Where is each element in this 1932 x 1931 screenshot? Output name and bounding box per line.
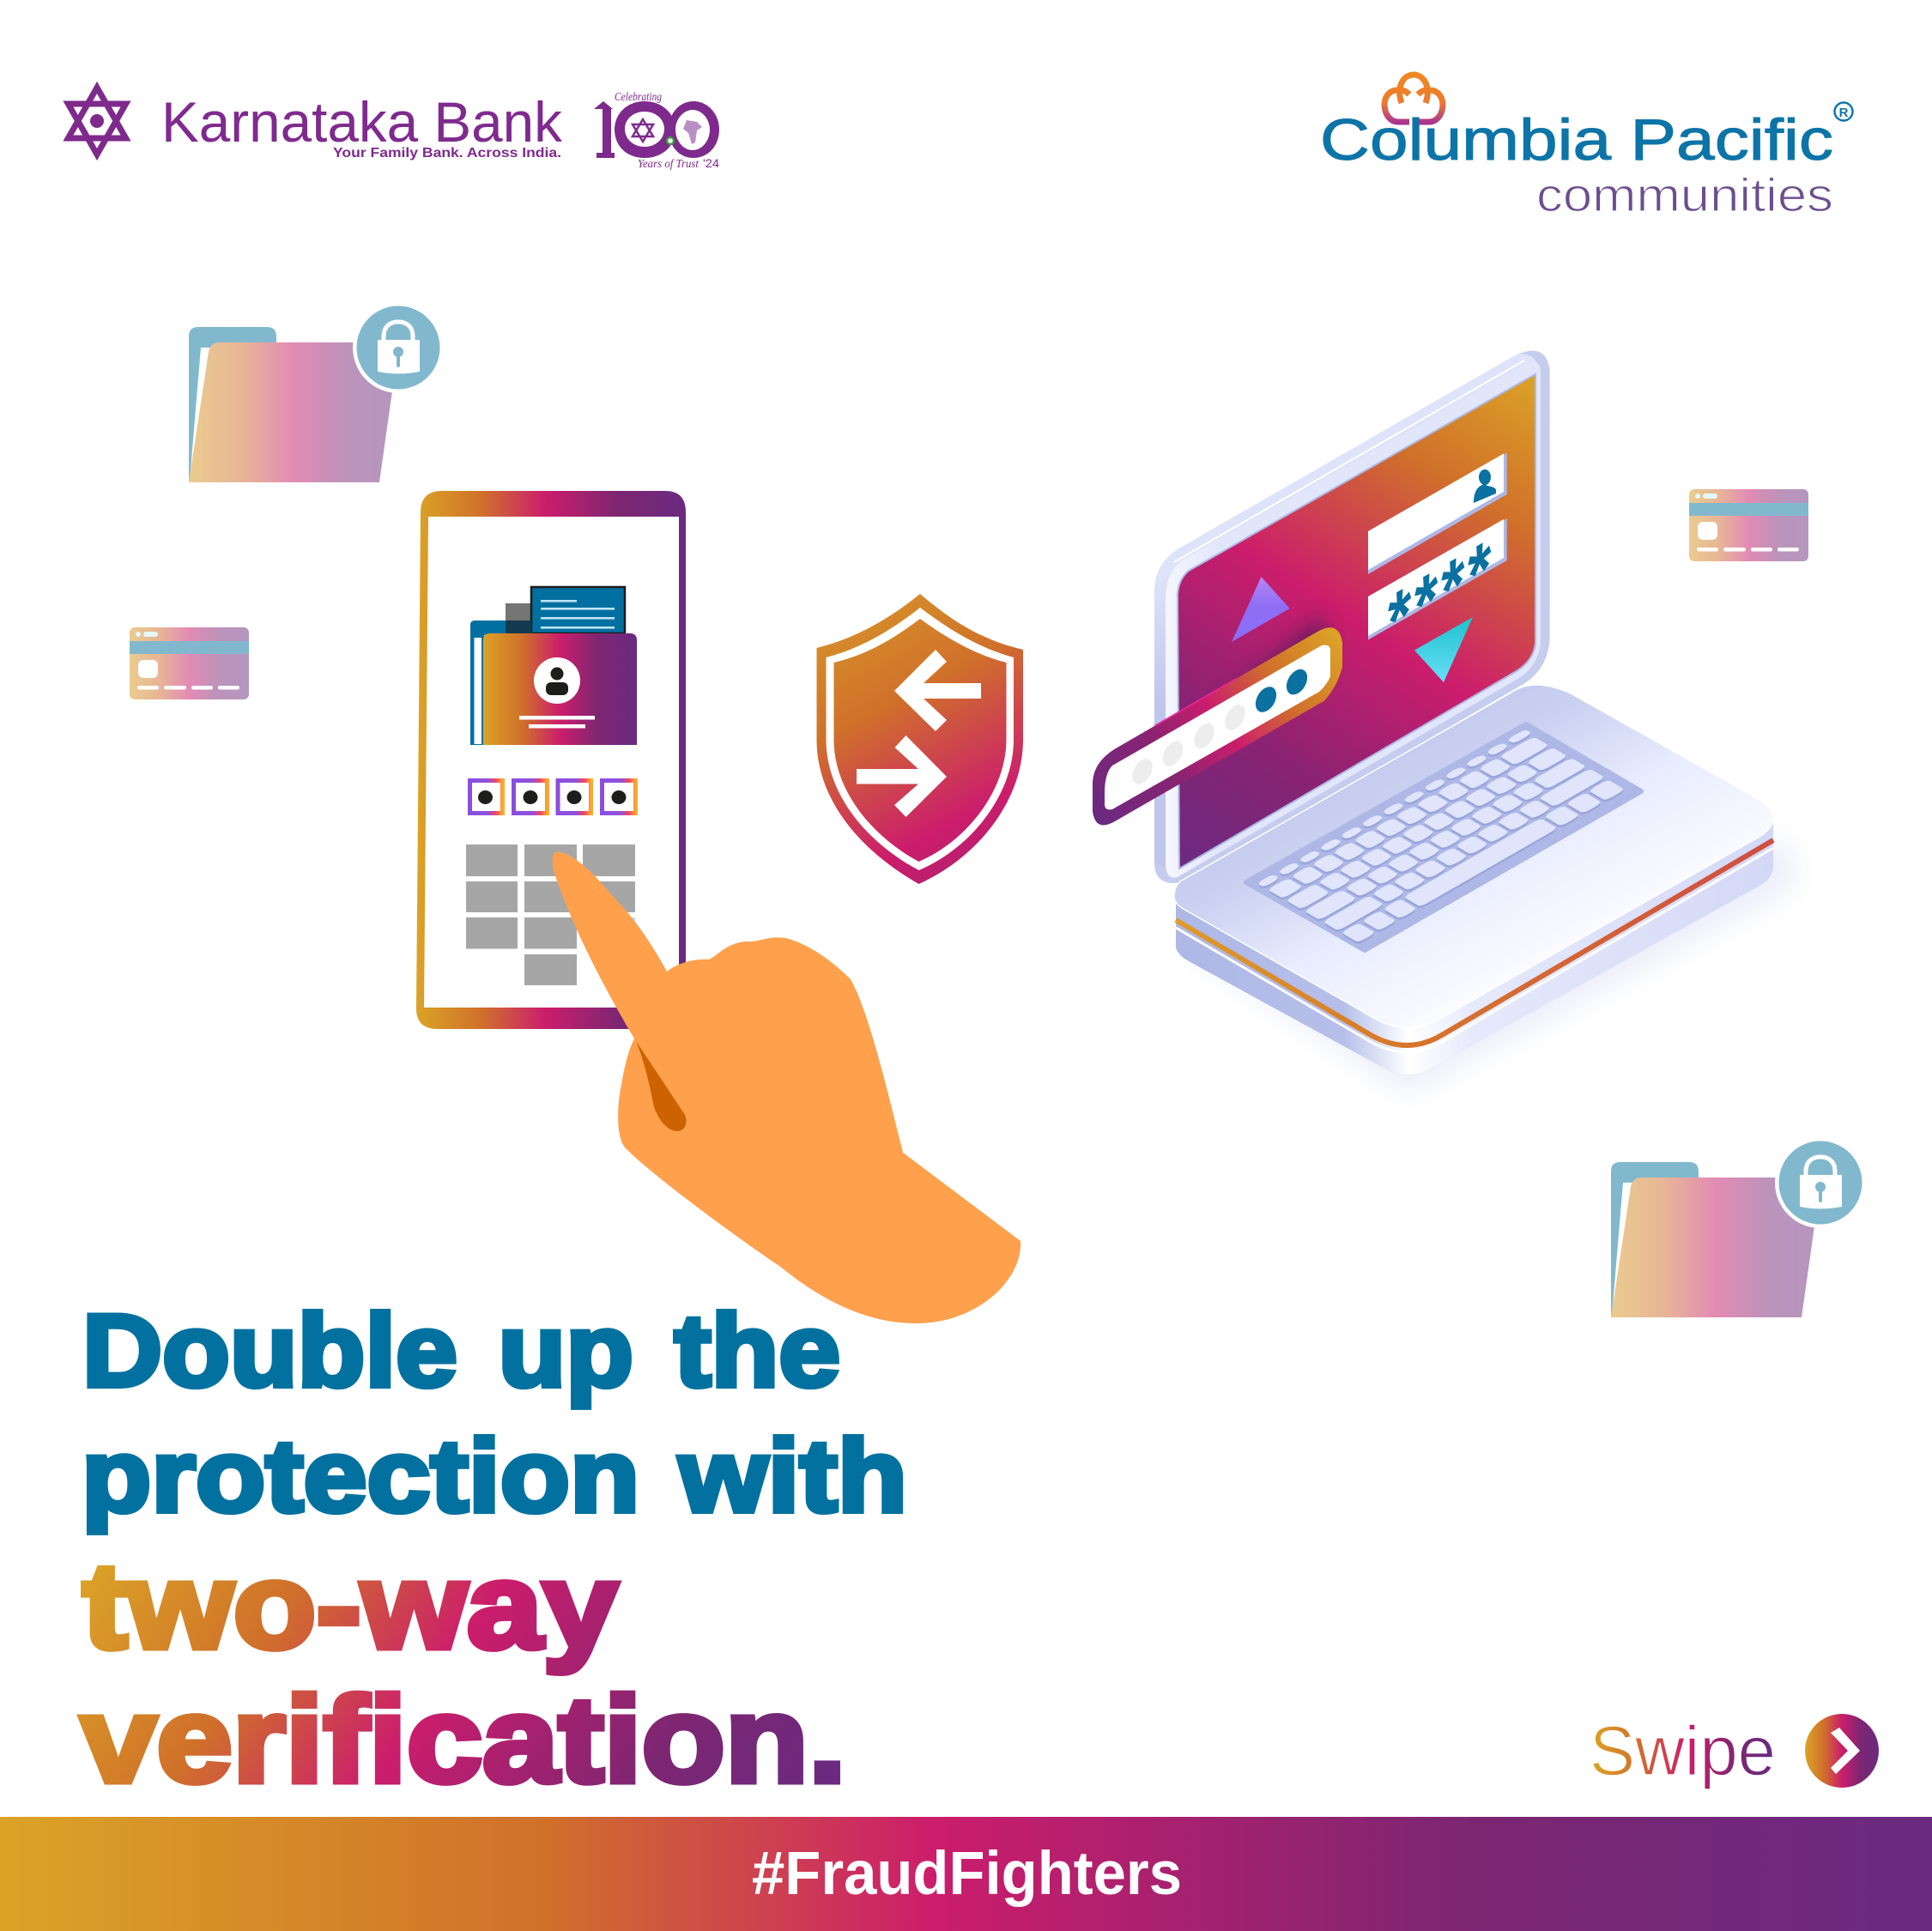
finger crease [636,1041,687,1131]
keypad [466,844,635,985]
headline line 1: Double up the [82,1293,840,1408]
colour stripe [1176,840,1773,1045]
headline [81,1293,907,1808]
purple triangle [1232,577,1290,642]
keyboard keys [1257,729,1626,942]
india map [683,120,702,144]
pillar numeral one [594,101,615,158]
laptop lid [1154,351,1550,883]
second zero ring [669,101,719,158]
footer band [0,1817,1932,1931]
bank name: Karnataka Bank [161,90,563,154]
laptop shadow [1184,841,1796,1092]
icon: six-point star [68,88,126,154]
celebrating text: Celebrating [615,91,662,104]
icon: locked folder top left [189,302,444,482]
password field: **** [1388,520,1494,669]
logo: celebrating 100 years of trust [594,91,719,171]
profile folder [470,587,637,745]
laptop base sides [1176,815,1773,1074]
hand pointing at phone [553,852,1021,1323]
wordmark: Columbia Pacific [1320,107,1833,173]
first zero ring [615,101,675,158]
small star [633,119,653,142]
icon: cloud knot [1384,75,1443,122]
swipe prompt [1590,1712,1879,1790]
headline line 2: protection with [82,1419,907,1534]
icon: chevron button [1805,1714,1879,1788]
communities: communities [1536,168,1833,221]
headline line 3: two-way [82,1538,618,1674]
PIN entry boxes [470,781,635,814]
keyboard well [1246,724,1641,950]
cyan triangle [1414,617,1473,682]
icon: credit card right [1689,489,1808,561]
phone frame [416,491,686,1029]
laptop screen [1178,374,1535,869]
swipe label: Swipe [1590,1712,1776,1790]
bank tagline: Your Family Bank. Across India. [333,146,561,160]
arrow right [857,735,947,817]
registered mark: R [1839,106,1849,120]
username field [1368,453,1507,574]
phone illustration [416,491,686,1029]
years of trust text: Years of Trust [638,158,700,171]
icon: locked folder bottom right [1611,1137,1866,1317]
arrow left [894,650,981,731]
headline line 4: verification. [81,1672,846,1808]
laptop illustration [1093,351,1796,1092]
security shield [817,594,1023,884]
green link [667,137,674,144]
icon: credit card left [130,627,249,699]
hashtag: #FraudFighters [752,1840,1182,1908]
logo: Columbia Pacific communities [1320,75,1852,221]
logo: Karnataka Bank [68,88,563,160]
1924 text: '24 [703,156,719,170]
password pill [1093,627,1342,825]
registered mark [1835,103,1852,120]
laptop top face [1174,685,1773,1028]
icon: user [1474,469,1496,503]
pill shadow on screen [1234,610,1335,679]
